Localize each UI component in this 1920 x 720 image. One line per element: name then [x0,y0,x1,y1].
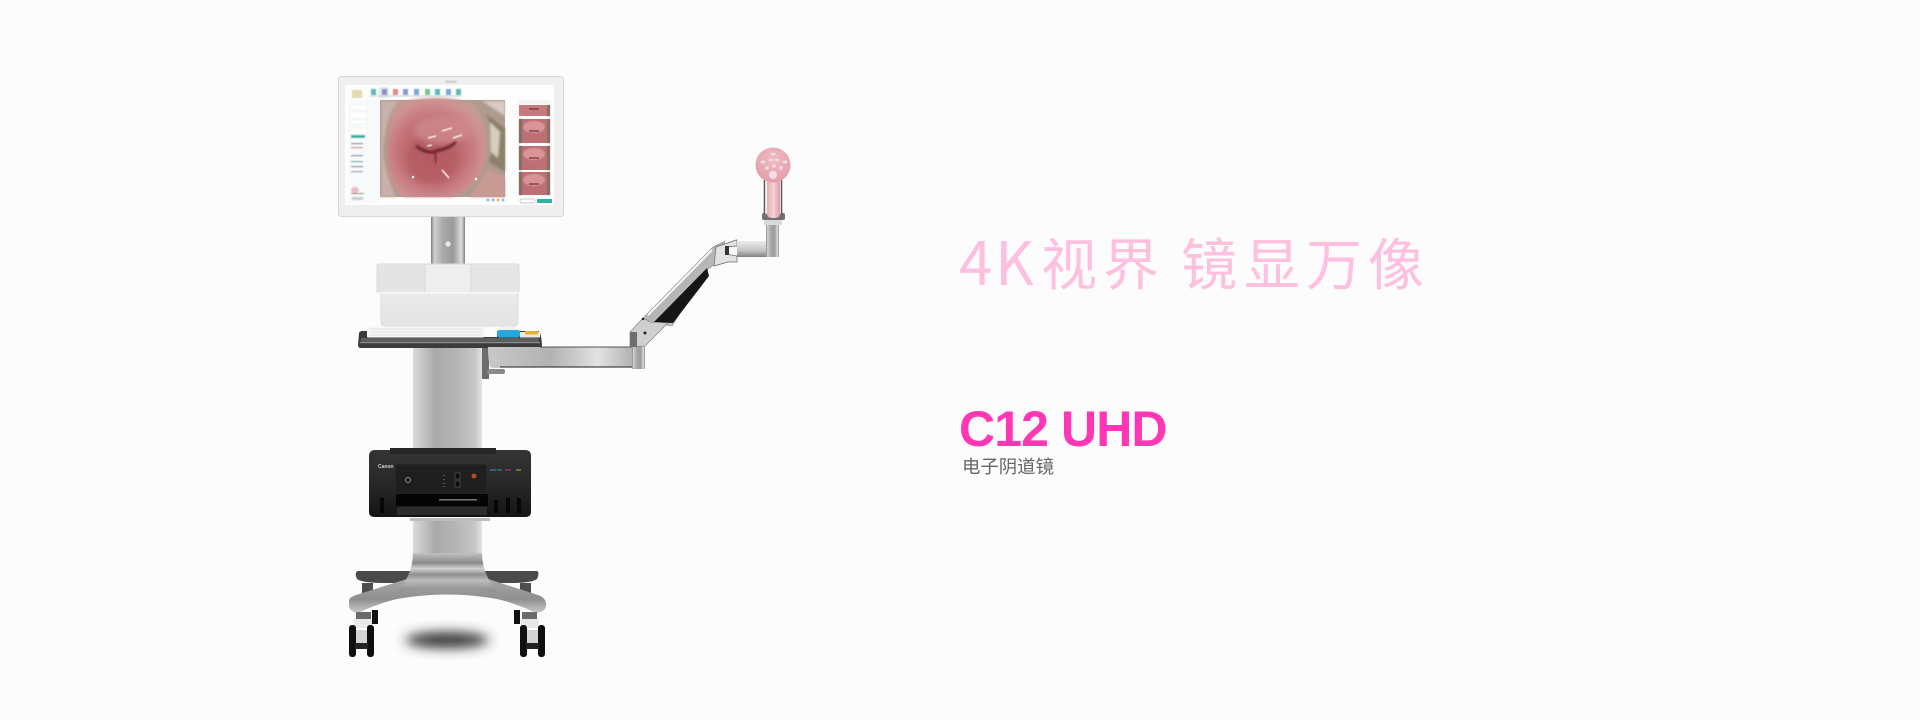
black gas-spring cover [654,268,709,323]
colposcope photo [380,98,505,197]
keyboard [367,326,540,338]
right caster [520,612,545,657]
software toolbar [352,87,462,98]
accessory tray [377,264,519,326]
lower arm joint [630,318,668,347]
software buttons [520,199,552,203]
handle buttons [761,153,787,179]
software left sidebar [349,100,379,203]
diagonal arm [643,241,725,326]
upper foot arms [356,571,538,593]
keyboard shelf [358,331,542,348]
monitor brand mark: EDAN [445,79,457,84]
blue mouse [497,326,520,338]
ink colours [490,469,502,471]
main column lower [413,521,482,554]
photo controls [486,198,504,202]
thumbnail strip [519,100,551,195]
monitor pole [431,214,465,266]
rear casters [372,610,520,624]
side rails [764,180,782,214]
horizontal arm [488,346,645,369]
handheld camera [756,148,790,225]
handle head [756,148,790,182]
vertical post [766,222,779,257]
monitor [338,76,564,216]
arm mount [482,348,505,379]
printer [369,448,531,521]
headline: 视界镜显万像 [1041,221,1424,302]
product subtitle: 电子阴道镜 [962,456,1054,477]
upper arm bracket [714,240,778,266]
base flare [398,553,497,592]
printer panel [395,464,487,494]
handle body [767,180,780,218]
printer brand: Canon [378,464,394,470]
headline: 4K [959,216,1034,303]
base legs [349,578,546,613]
main column upper [413,348,482,450]
shadow under cart [405,632,489,648]
device: colposcope cart [338,76,790,657]
product name: C12 UHD [959,401,1167,457]
warning label [525,331,538,334]
left caster [349,612,374,657]
